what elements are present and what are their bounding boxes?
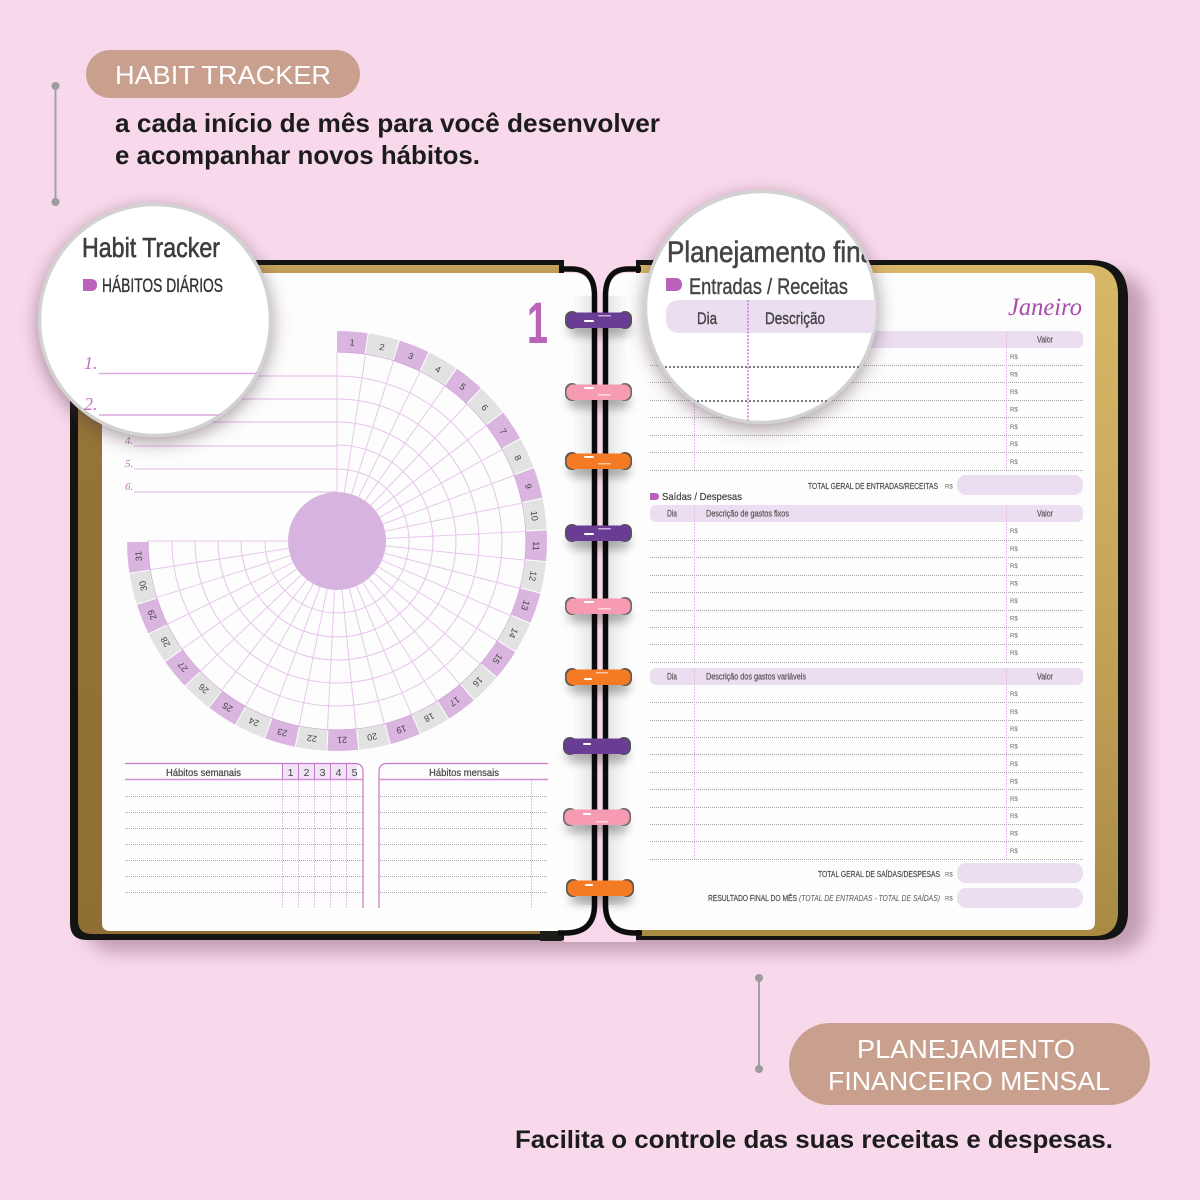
- table: weekly habits: Hábitos semanais: [166, 767, 241, 779]
- wheel day numbers: 8: [512, 454, 523, 462]
- right page: [608, 273, 1095, 930]
- magnified section heading: HÁBITOS DIÁRIOS: [102, 276, 223, 297]
- wheel day numbers: 24: [247, 715, 261, 728]
- table: variable expenses: Valor: [1037, 672, 1053, 682]
- expenses total: R$: [945, 872, 953, 878]
- table: fixed expenses: R$: [1010, 564, 1018, 570]
- wheel day numbers: 28: [159, 635, 172, 649]
- table: income: R$: [1010, 408, 1018, 414]
- binder rails: [558, 269, 642, 933]
- table: weekly habits: 2: [304, 767, 310, 779]
- table: variable expenses: Descrição dos gastos variáveis: [706, 672, 806, 682]
- wheel day numbers: [133, 337, 541, 745]
- table: fixed expenses: Descrição de gastos fixos: [706, 508, 789, 518]
- ring 6 orange: [565, 668, 632, 686]
- wheel day numbers: 11: [531, 541, 541, 551]
- ring 5 pink: [565, 597, 632, 615]
- expenses total: TOTAL GERAL DE SAÍDAS/DESPESAS: [818, 870, 940, 879]
- table: income: [650, 331, 1083, 470]
- habit list numbers: 5.: [125, 458, 133, 470]
- table: variable expenses: R$: [1010, 780, 1018, 786]
- spine gap: [564, 258, 636, 942]
- table: variable expenses: R$: [1010, 849, 1018, 855]
- binder ring shadows: [566, 322, 632, 904]
- wheel day numbers: 2: [378, 342, 386, 353]
- badge: financial planning: FINANCEIRO MENSAL: [828, 1066, 1110, 1096]
- wheel day numbers: 4: [433, 364, 443, 375]
- left page: [102, 273, 592, 931]
- habit list numbers: 6.: [125, 481, 133, 493]
- table: income: R$: [1010, 460, 1018, 466]
- table: weekly habits: 1: [288, 767, 294, 779]
- table: fixed expenses: R$: [1010, 634, 1018, 640]
- ring 1 purple: [565, 311, 632, 329]
- month result: RESULTADO FINAL DO MÊS: [708, 894, 797, 903]
- habit list lines: [134, 376, 337, 492]
- wheel day numbers: 7: [498, 427, 509, 436]
- table: variable expenses: R$: [1010, 797, 1018, 803]
- magnified habit lines: 1.: [84, 353, 98, 373]
- table: income: R$: [1010, 355, 1018, 361]
- planner cover: right: [636, 260, 1128, 940]
- description text: [115, 108, 660, 170]
- wheel day numbers: 22: [306, 733, 317, 744]
- wheel day numbers: 18: [422, 711, 436, 724]
- wheel day numbers: 19: [395, 723, 408, 736]
- callout: financial planning: [515, 974, 1150, 1154]
- wheel day numbers: 5: [458, 381, 468, 392]
- wheel day numbers: 17: [448, 694, 462, 708]
- wheel rings: [148, 352, 526, 730]
- magnified habit lines: 2.: [84, 394, 98, 414]
- expenses total: [818, 863, 1083, 883]
- month result: R$: [945, 896, 953, 902]
- table: fixed expenses: R$: [1010, 547, 1018, 553]
- wheel day numbers: 26: [197, 682, 211, 696]
- magnified habit lines: [84, 357, 257, 416]
- month result: (TOTAL DE ENTRADAS - TOTAL DE SAÍDAS): [799, 894, 940, 903]
- badge: habit tracker: HABIT TRACKER: [115, 60, 331, 90]
- table: income: Valor: [1037, 334, 1053, 344]
- wheel day numbers: 9: [523, 482, 534, 490]
- magnified table header: Descrição: [765, 309, 825, 328]
- wheel day numbers: 31: [133, 551, 144, 561]
- habit list numbers: [125, 435, 133, 493]
- magnified table header: [666, 300, 880, 333]
- table: fixed expenses: R$: [1010, 616, 1018, 622]
- magnifier: habit tracker: [40, 204, 272, 436]
- wheel day numbers: 14: [507, 626, 520, 640]
- wheel day numbers: 23: [276, 726, 288, 739]
- wheel day numbers: 13: [519, 599, 532, 612]
- magnifier: financial planning: [645, 192, 880, 422]
- table: variable expenses: R$: [1010, 692, 1018, 698]
- table: fixed expenses: [650, 505, 1083, 662]
- table: income: R$: [1010, 390, 1018, 396]
- income total: R$: [945, 484, 953, 490]
- table: income: R$: [1010, 442, 1018, 448]
- magnified table header: Dia: [697, 309, 717, 328]
- table: variable expenses: R$: [1010, 832, 1018, 838]
- table: weekly habits: 4: [336, 767, 342, 779]
- wheel day numbers: 12: [527, 570, 539, 582]
- wheel day numbers: 6: [479, 402, 490, 413]
- description text: e acompanhar novos hábitos.: [115, 140, 480, 170]
- wheel day numbers: 1: [349, 337, 355, 348]
- badge: financial planning: PLANEJAMENTO: [857, 1034, 1075, 1064]
- wheel day numbers: 21: [337, 735, 347, 745]
- ring 3 orange: [565, 452, 632, 470]
- wheel day numbers: 27: [176, 660, 190, 674]
- income total: TOTAL GERAL DE ENTRADAS/RECEITAS: [808, 482, 938, 491]
- magnified section heading: Entradas / Receitas: [689, 274, 848, 299]
- ring 2 pink: [565, 383, 632, 401]
- wheel day numbers: 10: [529, 510, 540, 521]
- wheel day numbers: 30: [137, 580, 149, 592]
- month title: Janeiro: [1008, 294, 1082, 321]
- planner shadow: [84, 274, 1146, 952]
- badge: habit tracker: [86, 50, 360, 98]
- binder rings: [563, 311, 634, 897]
- ring 8 pink: [563, 808, 631, 826]
- wheel spokes: [148, 352, 526, 730]
- month result: [708, 888, 1083, 908]
- wheel day numbers: 20: [366, 731, 378, 743]
- connector line: [52, 82, 60, 206]
- habit list numbers: 4.: [125, 435, 133, 447]
- table: fixed expenses: R$: [1010, 651, 1018, 657]
- table: monthly habits: [379, 764, 548, 908]
- description text: Facilita o controle das suas receitas e despesas.: [515, 1126, 1113, 1154]
- planner cover: left: [70, 260, 564, 941]
- table: variable expenses: R$: [1010, 727, 1018, 733]
- table: variable expenses: [650, 668, 1083, 860]
- table: variable expenses: R$: [1010, 814, 1018, 820]
- table: monthly habits: Hábitos mensais: [429, 767, 499, 779]
- table: fixed expenses: R$: [1010, 599, 1018, 605]
- table: income: R$: [1010, 425, 1018, 431]
- connector line: [755, 974, 763, 1073]
- wheel day numbers: 16: [471, 675, 485, 689]
- callout: habit tracker: [52, 50, 660, 206]
- habit wheel: [125, 331, 549, 753]
- income total: [808, 475, 1083, 495]
- ring 9 orange: [566, 879, 634, 897]
- badge: financial planning: [789, 1023, 1150, 1105]
- wheel day numbers: 3: [407, 351, 415, 362]
- magnified section heading: [666, 278, 848, 294]
- page gutter shading: [572, 296, 628, 905]
- table: variable expenses: Dia: [667, 672, 677, 682]
- table: income: R$: [1010, 372, 1018, 378]
- wheel day cells: [125, 331, 549, 753]
- page number: 1: [527, 291, 548, 356]
- table: fixed expenses: R$: [1010, 582, 1018, 588]
- heading: expenses: Saídas / Despesas: [662, 491, 742, 503]
- magnified dotted lines: [662, 300, 859, 420]
- magnified section heading: [83, 274, 222, 292]
- ring 7 purple: [563, 737, 631, 755]
- wheel centre: [288, 492, 386, 590]
- description text: a cada início de mês para você desenvolver: [115, 108, 660, 138]
- table: variable expenses: R$: [1010, 710, 1018, 716]
- wheel day numbers: 15: [490, 652, 504, 666]
- magnified title: Habit Tracker: [82, 232, 220, 263]
- table: fixed expenses: Dia: [667, 508, 677, 518]
- wheel day numbers: 25: [221, 700, 234, 714]
- table: weekly habits: 3: [320, 767, 326, 779]
- table: variable expenses: R$: [1010, 744, 1018, 750]
- magnified title: Planejamento fina: [667, 236, 875, 269]
- table: weekly habits: [125, 764, 363, 908]
- table: fixed expenses: R$: [1010, 529, 1018, 535]
- ring 4 purple: [565, 524, 632, 542]
- wheel day numbers: 29: [146, 608, 159, 621]
- table: fixed expenses: Valor: [1037, 508, 1053, 518]
- table: variable expenses: R$: [1010, 762, 1018, 768]
- table: weekly habits: 5: [352, 767, 358, 779]
